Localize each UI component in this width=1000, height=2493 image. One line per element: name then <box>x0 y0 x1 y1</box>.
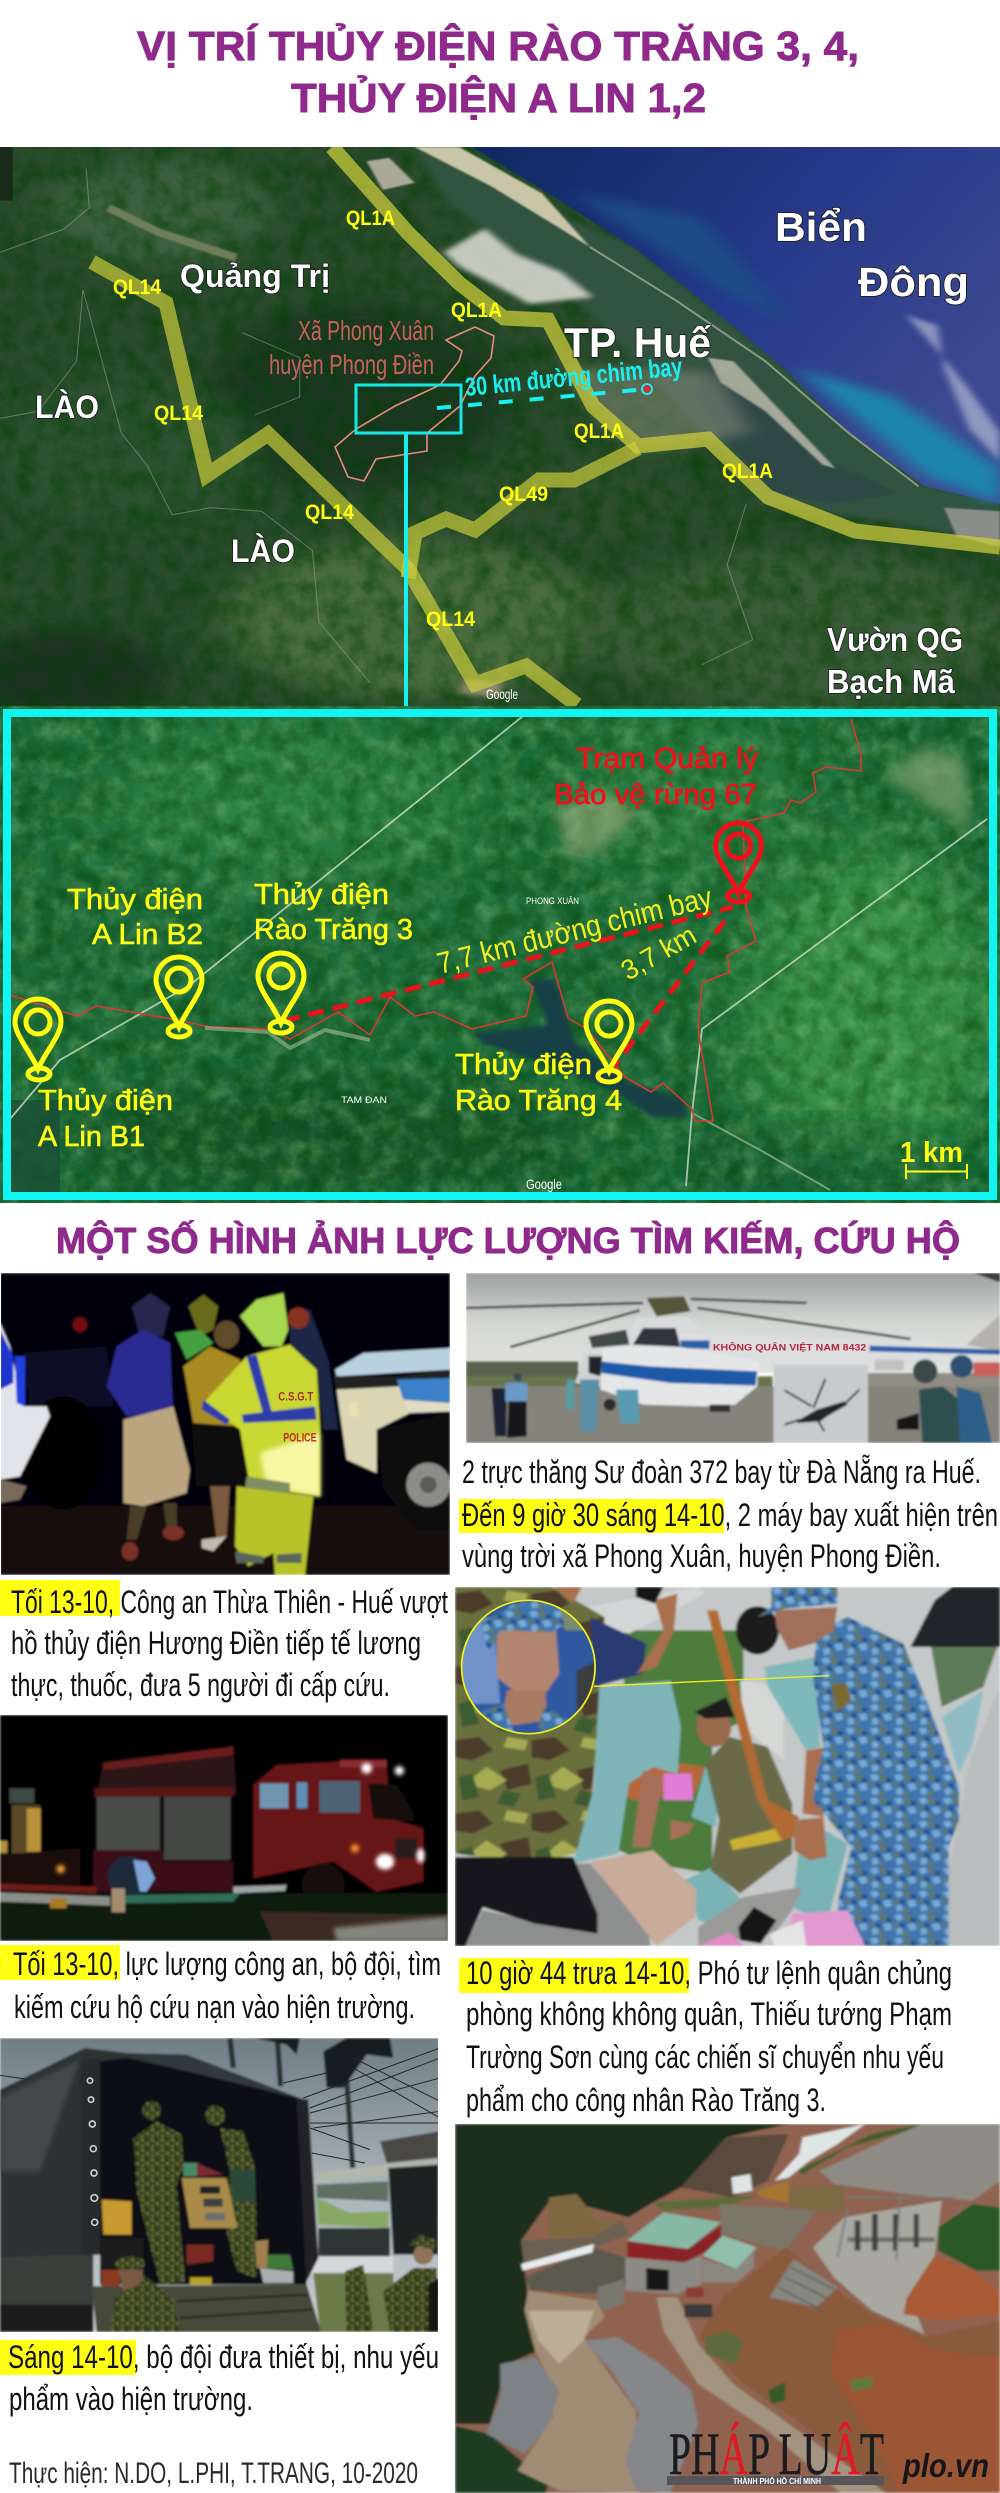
panel: regional satellite map <box>0 147 1000 722</box>
map labels: LÀO <box>35 389 99 425</box>
detail map labels: TAM ĐAN <box>341 1095 387 1105</box>
photo: helicopter on airfield <box>466 1273 1000 1443</box>
photo: deputy commander in helicopter <box>455 1587 1000 1946</box>
distance line: 7.7 km <box>284 907 733 1021</box>
road: QL14 <box>92 262 577 705</box>
caption: police crossing the lake: hồ thủy điện Hương Điền tiếp tế lương <box>11 1625 421 1661</box>
photo: helicopter on airfield: KHÔNG QUÂN VIỆT NAM 8432 <box>713 1341 866 1352</box>
map labels: QL1A <box>722 460 773 483</box>
map labels: LÀO <box>231 533 295 569</box>
map labels: huyện Phong Điền <box>269 349 434 380</box>
caption: night operation: kiếm cứu hộ cứu nạn vào hiện trường. <box>14 1989 415 2025</box>
pointer line <box>594 1676 829 1686</box>
map labels: QL1A <box>346 207 395 230</box>
caption: deputy commander: phẩm cho công nhân Rào Trăng 3. <box>466 2082 826 2118</box>
title: THỦY ĐIỆN A LIN 1,2 <box>291 75 706 121</box>
map labels: QL1A <box>451 299 502 322</box>
map labels: TP. Huế <box>564 319 712 366</box>
caption: police crossing the lake: thực, thuốc, đưa 5 người đi cấp cứu. <box>11 1667 390 1703</box>
caption: night operation: Tối 13-10, lực lượng công an, bộ đội, tìm <box>13 1946 441 1982</box>
scale bar: 1 km: 1 km <box>900 1137 963 1169</box>
detail map labels: Thủy điện <box>455 1049 592 1081</box>
caption: police crossing the lake: Tối 13-10, Công an Thừa Thiên - Huế vượt <box>11 1584 448 1620</box>
detail map labels: Google <box>526 1176 562 1192</box>
detail map labels: Rào Trăng 3 <box>254 914 413 946</box>
boundary: Phong Xuân commune <box>335 327 494 481</box>
detail map labels: A Lin B1 <box>38 1121 145 1153</box>
title: VỊ TRÍ THỦY ĐIỆN RÀO TRĂNG 3, 4, <box>137 23 859 69</box>
reservoir <box>472 979 689 1117</box>
map labels: QL14 <box>154 402 203 425</box>
panel: detail satellite map <box>0 706 1000 1203</box>
locator box <box>356 385 461 433</box>
detail map labels: Thủy điện <box>254 879 389 911</box>
photo: Rào Trăng 3 plant <box>455 2124 1000 2493</box>
detail map labels: Thủy điện <box>67 884 203 916</box>
marker: Huế <box>642 384 652 394</box>
pin: Thủy điện Rào Trăng 3 <box>258 953 304 1033</box>
portrait inset <box>460 1599 598 1735</box>
distance line: 3.7 km <box>609 918 727 1073</box>
caption: police crossing the lake <box>0 1580 448 1703</box>
pin: Thủy điện A Lin B2 <box>156 957 202 1037</box>
detail map labels: PHONG XUÂN <box>526 896 579 906</box>
map labels: Biển <box>775 204 867 250</box>
roads and boundary lines <box>10 716 987 1190</box>
road: QL49 <box>408 448 638 578</box>
map labels: Bạch Mã <box>827 663 956 700</box>
caption: helicopters <box>459 1454 998 1574</box>
photo: police helping at night: POLICE <box>283 1430 317 1444</box>
map labels: Xã Phong Xuân <box>298 315 434 346</box>
section heading: MỘT SỐ HÌNH ẢNH LỰC LƯỢNG TÌM KIẾM, CỨU HỘ <box>56 1219 960 1261</box>
map labels <box>35 204 969 702</box>
connector line <box>404 433 408 711</box>
detail map labels: Rào Trăng 4 <box>455 1085 622 1117</box>
map labels: QL14 <box>426 608 475 631</box>
distance line to Huế <box>437 389 647 408</box>
logo: Pháp Luật: PHÁP LUẬT <box>669 2421 884 2487</box>
detail map labels: A Lin B2 <box>92 919 203 951</box>
scale bar: 1 km <box>902 1141 968 1179</box>
detail map labels <box>38 743 759 1192</box>
photo: fire truck at night <box>0 1715 448 1941</box>
title <box>137 23 859 121</box>
map labels: QL14 <box>305 501 354 524</box>
map labels: QL49 <box>499 483 548 506</box>
map labels: QL14 <box>113 276 161 299</box>
detail map labels: Thủy điện <box>38 1085 173 1117</box>
map labels: Google <box>486 686 518 702</box>
pin: Thủy điện A Lin B1 <box>15 999 61 1080</box>
caption: soldiers: phẩm vào hiện trường. <box>9 2381 253 2417</box>
detail map labels: Trạm Quản lý <box>576 743 759 775</box>
detail map labels: Bảo vệ rừng 67 <box>554 779 757 811</box>
photo: police helping at night <box>0 1273 450 1575</box>
caption: deputy commander <box>459 1955 952 2118</box>
logo: Pháp Luật: plo.vn <box>902 2447 989 2484</box>
pin: Thủy điện Rào Trăng 4 <box>586 1001 632 1082</box>
detail map labels: 3,7 km <box>616 919 701 986</box>
logo: Pháp Luật: THÀNH PHỐ HỒ CHÍ MINH <box>733 2476 821 2486</box>
map labels: Vườn QG <box>827 621 963 658</box>
credit line: Thực hiện: N.DO, L.PHI, T.TRANG, 10-2020 <box>9 2457 418 2490</box>
photo: police helping at night: C.S.G.T <box>278 1390 314 1404</box>
caption: soldiers: Sáng 14-10, bộ đội đưa thiết bị, nhu yếu <box>8 2339 439 2375</box>
map labels: Quảng Trị <box>180 258 330 294</box>
pin: Trạm Quản lý Bảo vệ rừng 67 <box>716 823 762 902</box>
road: QL1A <box>332 147 1000 547</box>
caption: night operation <box>0 1945 441 2025</box>
detail map labels: 7,7 km đường chim bay <box>434 881 715 981</box>
map labels: 30 km đường chim bay <box>464 351 684 402</box>
map labels: Đông <box>858 259 969 305</box>
map labels: QL1A <box>574 420 624 443</box>
cyan frame <box>7 713 993 1196</box>
photo: soldiers unloading truck <box>0 2038 440 2332</box>
caption: soldiers <box>0 2339 439 2417</box>
